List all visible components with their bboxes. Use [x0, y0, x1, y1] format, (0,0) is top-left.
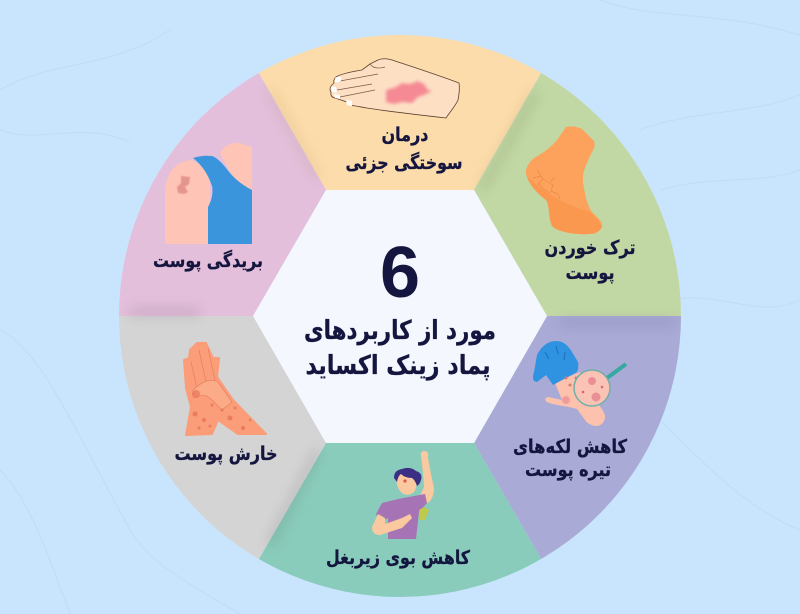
label: itching: خارش پوست — [174, 443, 278, 465]
big number 6: 6 — [380, 233, 420, 313]
icon: cut on shoulder — [165, 143, 252, 244]
label: cracked skin: پوست — [566, 262, 614, 284]
label: dark spots — [513, 436, 628, 481]
segment: burns — [259, 35, 541, 190]
shirt — [376, 494, 427, 539]
segment: dark spots — [474, 316, 681, 559]
segment: cracked skin — [474, 73, 681, 316]
face — [396, 472, 417, 495]
center heading: پماد زینک اکساید — [306, 351, 490, 381]
panel: wheel segments — [119, 35, 681, 597]
label: burns — [346, 124, 462, 174]
hair — [394, 468, 421, 486]
segment: itching — [119, 316, 326, 559]
label: cuts: بریدگی پوست — [153, 249, 263, 272]
label: burns: سوختگی جزئی — [346, 151, 462, 174]
label: cracked skin — [544, 237, 636, 284]
icon: burned hand — [330, 59, 459, 118]
segment: cuts — [119, 73, 326, 316]
label: dark spots: کاهش لکه‌های — [513, 436, 628, 458]
icon: dark spots on hand with magnifier — [533, 341, 626, 426]
label: underarm odor: کاهش بوی زیربغل — [326, 547, 471, 569]
segment: underarm odor — [259, 443, 541, 597]
center hexagon — [253, 190, 547, 443]
icon: itchy hands — [184, 343, 266, 435]
lower arm and hand — [372, 514, 412, 535]
icon: man raising arm — [372, 451, 434, 539]
label: burns: درمان — [382, 124, 429, 146]
icon: cracked foot — [526, 126, 602, 234]
stain — [419, 507, 429, 520]
center heading: مورد از کاربردهای — [304, 316, 496, 346]
label: cracked skin: ترک خوردن — [544, 237, 636, 259]
label: dark spots: تیره پوست — [525, 459, 611, 481]
arm raised — [418, 451, 434, 503]
center heading — [304, 316, 496, 381]
